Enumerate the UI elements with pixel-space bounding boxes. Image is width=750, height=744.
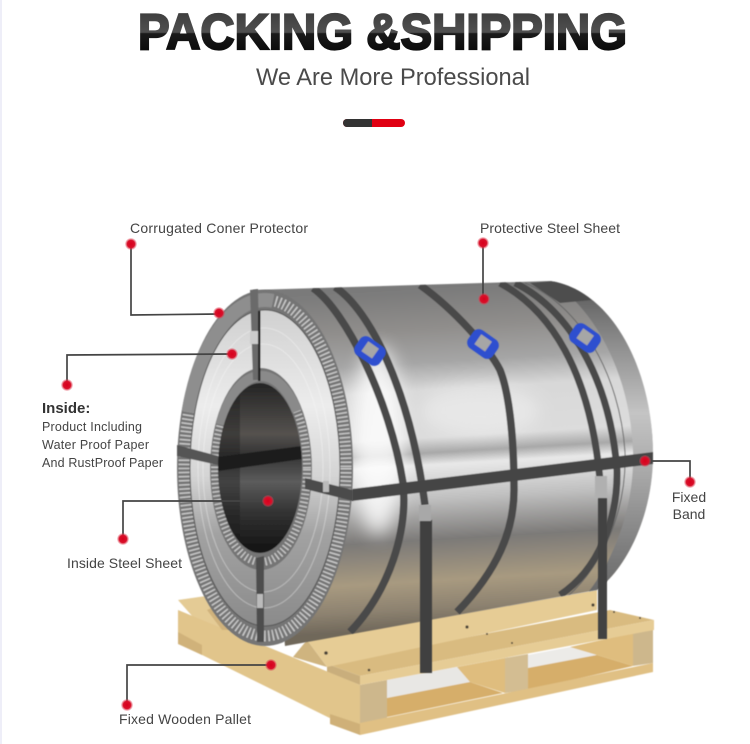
vertical strap left [419, 505, 432, 673]
face horizontal bands [177, 445, 353, 501]
callout: inside description: Product Including [42, 420, 142, 434]
buckle right [566, 320, 604, 356]
coil right end cap [525, 278, 660, 600]
callout: fixed band: Fixed [672, 489, 706, 505]
face paper annulus [190, 310, 340, 626]
callout: fixed wooden pallet [119, 659, 277, 727]
face vertical bands [250, 289, 264, 642]
callout: fixed band [639, 455, 706, 522]
callout: inside description: Inside: [42, 400, 90, 417]
face outer rim [177, 290, 353, 646]
face concentric rings [198, 328, 330, 608]
pallet coil beam and wedge [207, 590, 597, 667]
inner ring smooth top [215, 376, 307, 562]
buckle left [351, 333, 389, 369]
pallet nails [324, 603, 641, 671]
pallet back and floor [178, 595, 633, 717]
coil cylinder body [253, 281, 653, 646]
callout: protective steel sheet [477, 220, 620, 305]
callout: fixed band: Band [673, 506, 705, 522]
coil body highlight [352, 345, 540, 535]
wooden pallet [178, 590, 654, 735]
pallet deck [327, 610, 654, 685]
buckle middle [464, 326, 502, 362]
vertical strap right [595, 476, 607, 639]
pallet feet [360, 629, 653, 724]
title: PACKING &SHIPPING [138, 4, 627, 60]
callout: protective steel sheet: Protective Steel Sheet [480, 220, 620, 236]
pallet bottom board [360, 663, 653, 735]
page edge strip [0, 0, 2, 744]
coil front face [177, 289, 353, 646]
subtitle: We Are More Professional [256, 64, 530, 91]
callout: inside description: And RustProof Paper [42, 456, 163, 470]
rim smooth top [184, 300, 346, 636]
inner ring [210, 368, 312, 570]
coil hole [218, 383, 302, 553]
callout: corrugated corner protector: Corrugated Coner Protector [130, 220, 308, 236]
rim hatching [184, 300, 346, 636]
blue buckles and vertical straps [351, 320, 607, 673]
accent bar [343, 119, 405, 127]
inner ring hatching [215, 376, 307, 562]
steel coil [253, 278, 660, 646]
callout: inside description [42, 348, 238, 470]
callout: inside description: Water Proof Paper [42, 438, 149, 452]
horizontal fixed band on body [352, 452, 653, 501]
callout: corrugated corner protector [125, 220, 308, 319]
pallet side beam [178, 610, 360, 735]
coil straps [313, 283, 617, 632]
callout: inside steel sheet: Inside Steel Sheet [67, 555, 182, 571]
callout: fixed wooden pallet: Fixed Wooden Pallet [119, 711, 251, 727]
callout: inside steel sheet [67, 495, 274, 571]
